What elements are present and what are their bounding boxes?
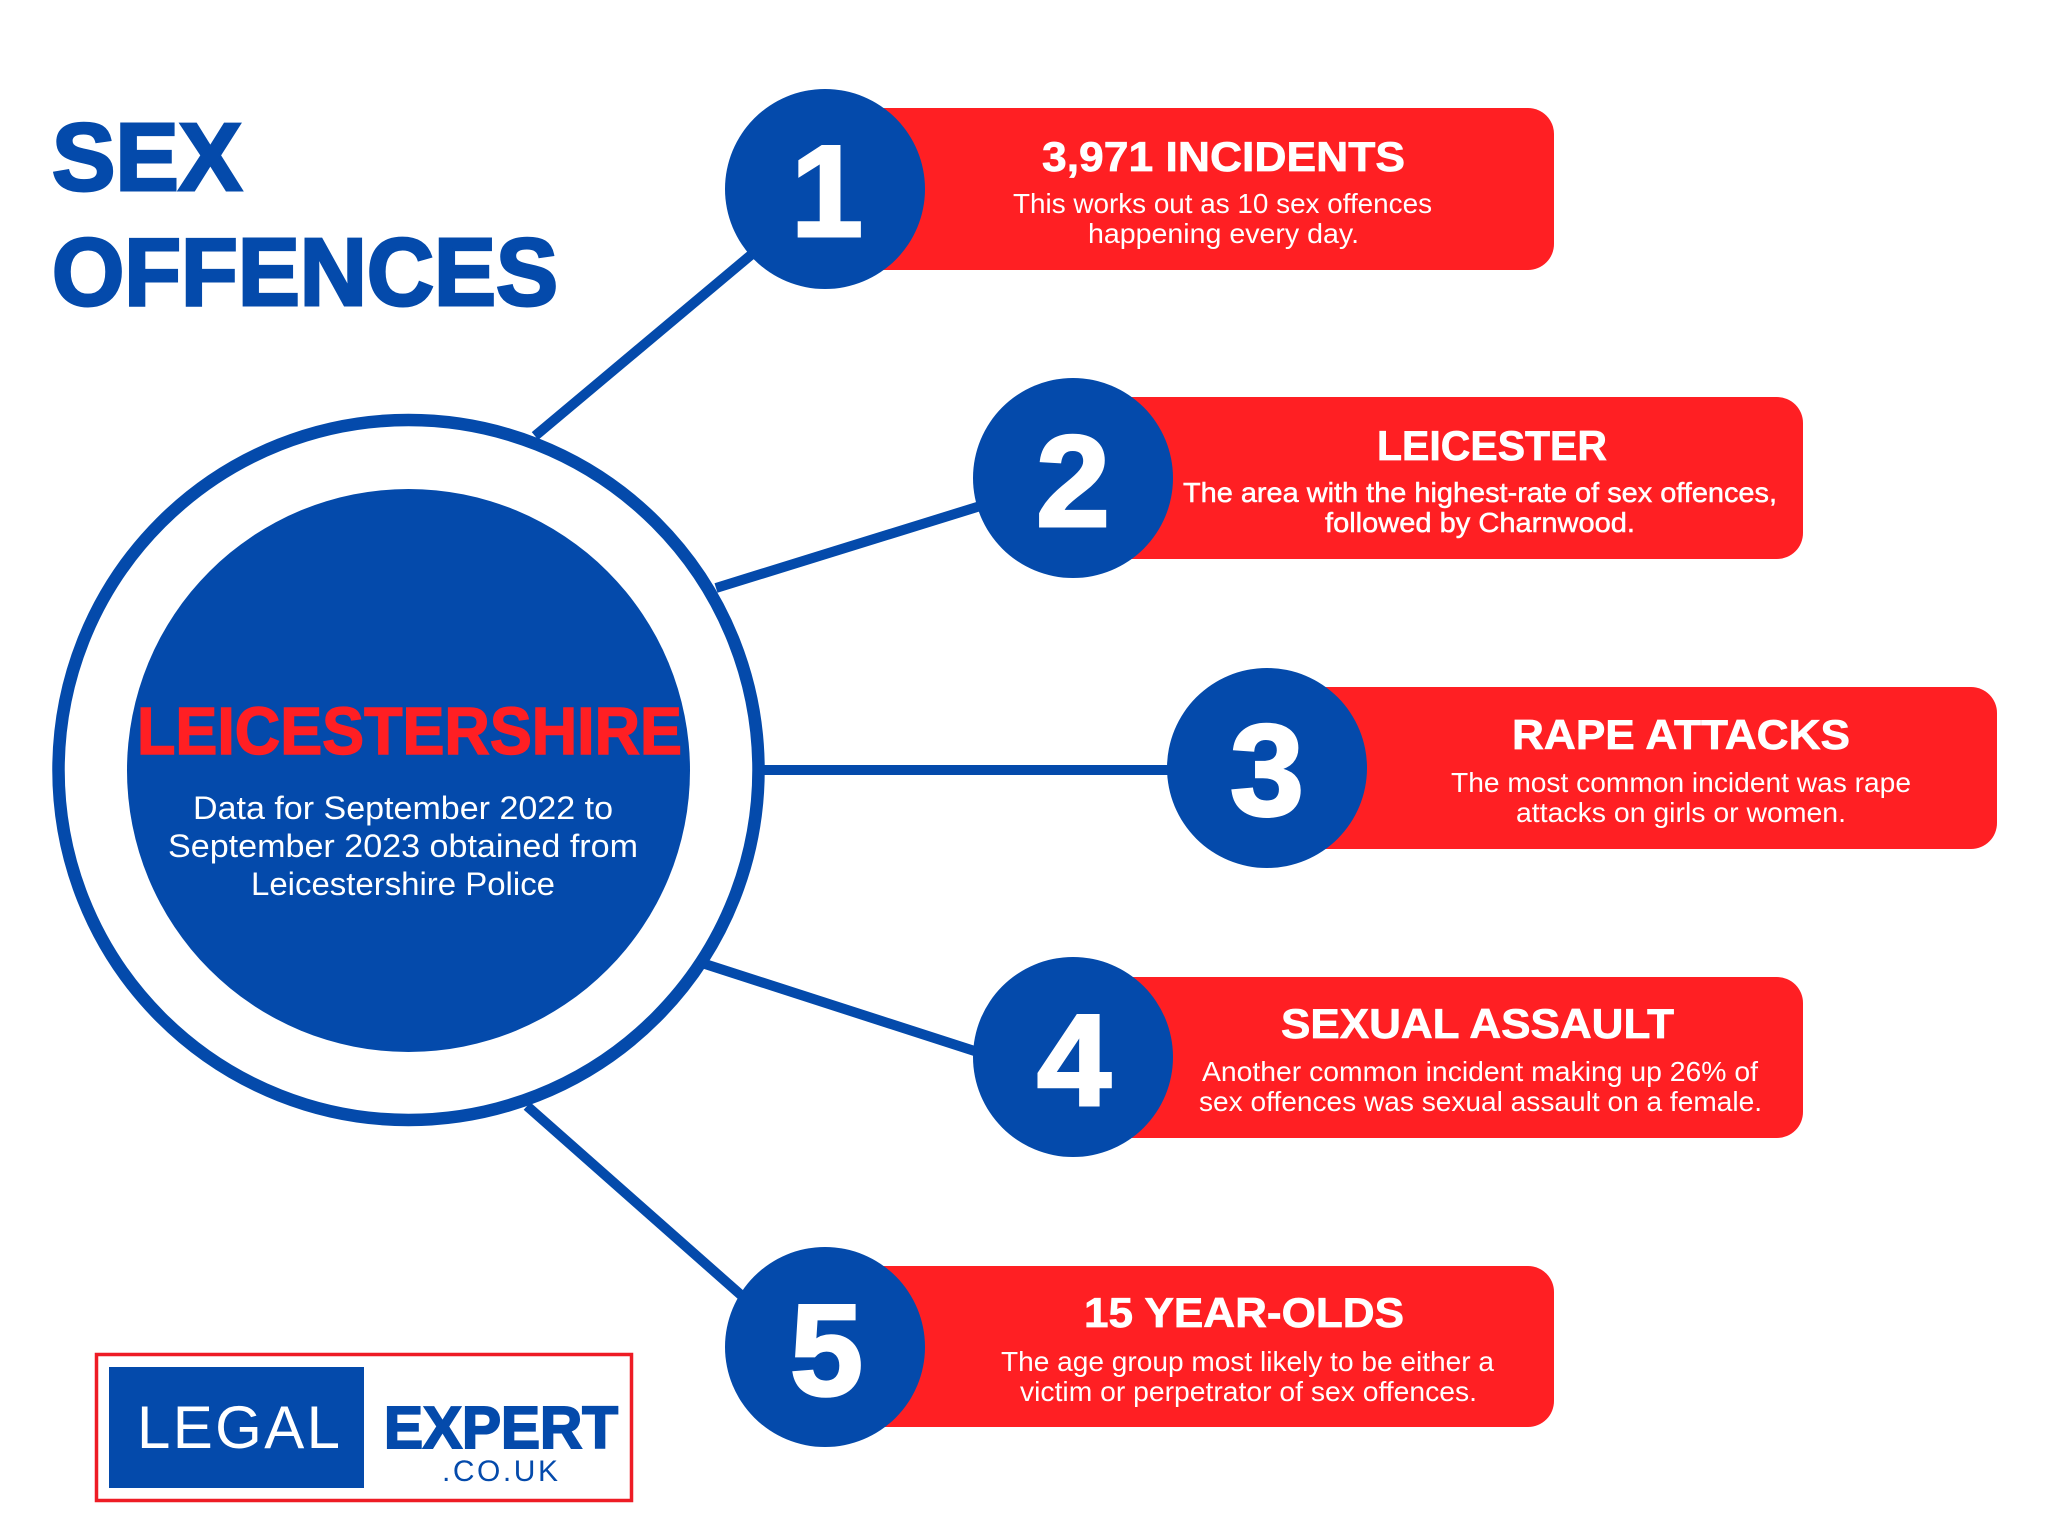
description: The most common incident was rape <box>1451 767 1911 798</box>
title: SEX <box>52 104 242 211</box>
panel: item 1 <box>725 89 1554 289</box>
panel: item 4 <box>973 957 1803 1157</box>
description: This works out as 10 sex offences <box>1013 188 1432 219</box>
description: Another common incident making up 26% of <box>1202 1056 1758 1087</box>
number 2: 2 <box>1036 408 1110 554</box>
number 1: 1 <box>791 118 863 264</box>
description: followed by Charnwood. <box>1325 507 1635 538</box>
number 5: 5 <box>790 1277 863 1423</box>
text: data source: Leicestershire Police <box>251 866 555 902</box>
description: The area with the highest-rate of sex offences, <box>1183 477 1777 508</box>
panel: item 2 <box>973 378 1803 578</box>
number 4: 4 <box>1037 987 1111 1133</box>
logo: Legal Expert <box>96 1354 632 1500</box>
heading: RAPE ATTACKS <box>1512 711 1850 758</box>
description <box>1183 477 1777 538</box>
text: data source: Data for September 2022 to <box>193 790 613 826</box>
heading: LEICESTER <box>1377 422 1607 469</box>
description: sex offences was sexual assault on a female. <box>1199 1086 1762 1117</box>
panel: item 5 <box>725 1247 1554 1447</box>
text: data source: September 2023 obtained from <box>168 828 638 864</box>
description <box>1001 1346 1494 1407</box>
central circle <box>58 420 758 1120</box>
description: The age group most likely to be either a <box>1001 1346 1494 1377</box>
heading: 3,971 INCIDENTS <box>1042 133 1405 180</box>
heading: LEICESTERSHIRE: LEICESTERSHIRE <box>137 694 682 769</box>
description: victim or perpetrator of sex offences. <box>1020 1376 1477 1407</box>
title: OFFENCES <box>52 219 558 326</box>
description: attacks on girls or women. <box>1516 797 1846 828</box>
description <box>1199 1056 1762 1117</box>
number 3: 3 <box>1230 697 1304 843</box>
description <box>1451 767 1911 828</box>
text: data source <box>168 790 638 902</box>
heading: 15 YEAR-OLDS <box>1084 1289 1404 1336</box>
panel: item 3 <box>1167 668 1997 868</box>
description <box>1013 188 1432 249</box>
connector lines <box>527 239 1180 1303</box>
logo: Legal Expert: LEGAL <box>137 1394 340 1461</box>
logo: Legal Expert: .CO.UK <box>442 1455 558 1488</box>
heading: SEXUAL ASSAULT <box>1281 1000 1674 1047</box>
description: happening every day. <box>1088 218 1359 249</box>
title <box>52 104 558 326</box>
logo: Legal Expert: EXPERT <box>384 1395 618 1461</box>
